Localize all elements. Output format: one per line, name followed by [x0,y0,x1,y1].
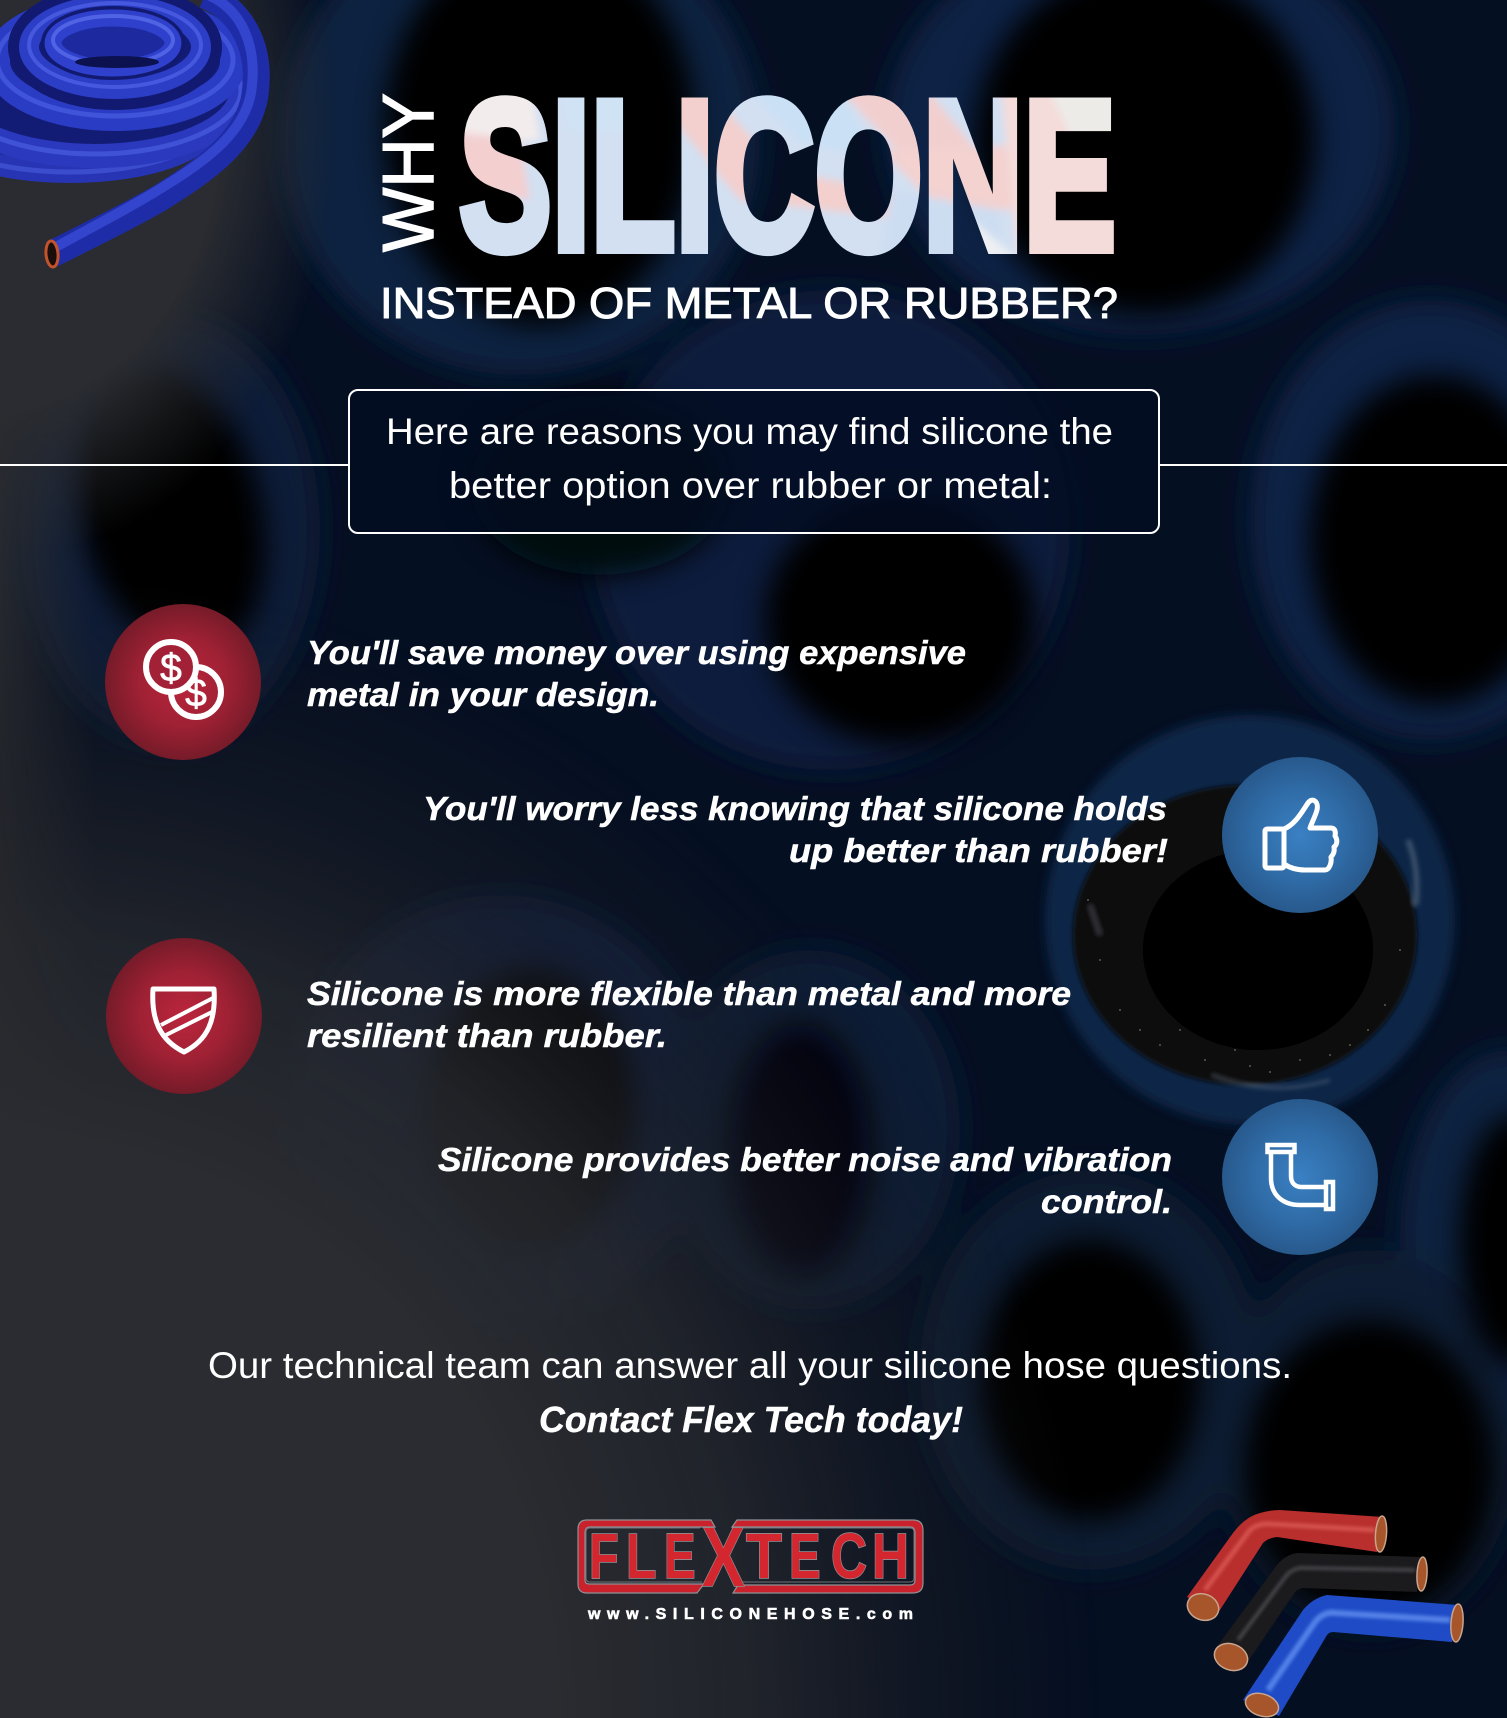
Flex Tech logo: L [626,1521,656,1592]
reason 2: worry less [423,757,1378,913]
photo: silicone elbow hoses [1184,1510,1464,1718]
Flex Tech logo [578,1509,923,1623]
reason 4: noise and vibration [438,1099,1378,1255]
icon: shield [106,938,262,1094]
text [423,790,1168,869]
text: up better than rubber! [789,832,1168,869]
text: control. [1041,1183,1172,1220]
icon: coins [105,604,261,760]
Flex Tech logo: E [789,1520,821,1592]
Flex Tech logo: T [746,1521,782,1593]
text: Silicone is more flexible than metal and more [307,975,1071,1012]
title word: SILICONE: SILICONE [459,57,1116,295]
Flex Tech logo: F [589,1522,619,1593]
subtitle: INSTEAD OF METAL OR RUBBER? [380,279,1118,328]
call to action: Our technical team can answer all your silicone hose questions. [208,1345,1292,1386]
title [369,57,1118,328]
blue elbow [1242,1595,1464,1718]
text: You'll worry less knowing that silicone holds [423,790,1167,827]
black elbow [1211,1553,1428,1675]
title word: WHY: WHY [369,93,449,252]
Flex Tech logo: X [702,1509,745,1604]
text: resilient than rubber. [307,1017,667,1054]
intro panel [0,390,1507,533]
text [438,1141,1172,1220]
Flex Tech logo: H [872,1522,909,1592]
reason 1: save money [105,604,966,760]
intro text: better option over rubber or metal: [449,465,1052,506]
icon: pipe elbow [1222,1099,1378,1255]
intro text: Here are reasons you may find silicone the [386,411,1113,452]
call to action: Contact Flex Tech today! [539,1399,963,1440]
icon: coins: $ [160,647,182,690]
text [307,975,1071,1054]
red elbow [1184,1510,1388,1625]
Flex Tech logo: C [831,1521,867,1592]
intro text [386,411,1113,506]
Flex Tech logo: www.SILICONEHOSE.com [587,1606,913,1623]
icon: coins: $ [185,672,207,715]
sharp foreground tube [1045,715,1455,1125]
text: metal in your design. [307,676,659,713]
photo: coiled blue silicone hose [0,0,256,267]
call to action [208,1345,1292,1440]
Flex Tech logo: E [664,1520,696,1592]
text [307,634,966,713]
text: You'll save money over using expensive [307,634,966,671]
reason 3: flexible [106,938,1071,1094]
text: Silicone provides better noise and vibration [438,1141,1172,1178]
icon: thumbs up [1222,757,1378,913]
